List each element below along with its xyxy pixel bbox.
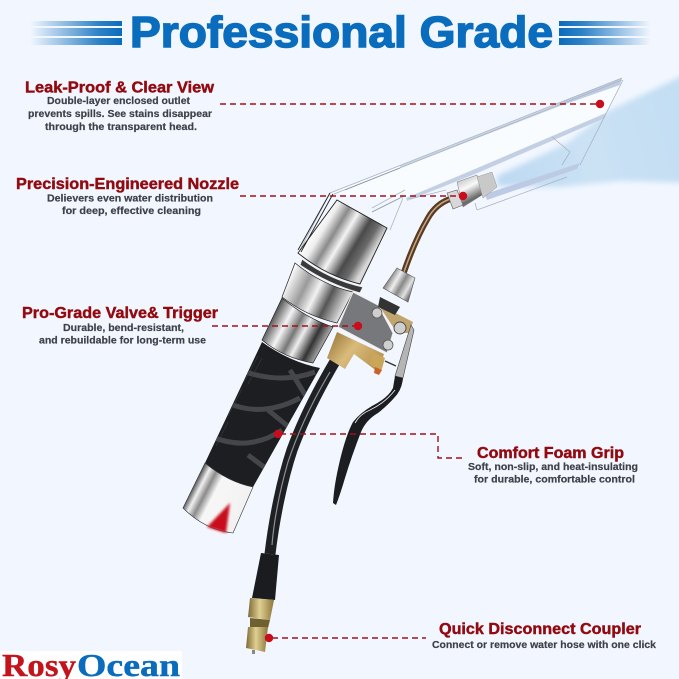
chrome lower section <box>262 298 333 363</box>
transparent head <box>300 78 623 250</box>
quick coupler <box>246 598 274 654</box>
description: nozzle: for deep, effective cleaning <box>62 206 201 217</box>
compression nut <box>378 268 415 315</box>
description: leak-proof <box>28 96 212 133</box>
callout: leak-proof <box>25 80 604 133</box>
brass nozzle <box>447 172 497 209</box>
valve plate <box>338 292 413 353</box>
extractor wand illustration <box>183 78 623 654</box>
leader: valve <box>212 322 362 330</box>
description: coupler: Connect or remove water hose with one click <box>432 640 656 651</box>
hose ferrule <box>252 553 279 600</box>
flexible hose <box>270 358 337 554</box>
heading: coupler: Quick Disconnect Coupler <box>439 621 641 638</box>
foam grip <box>205 342 320 487</box>
description: leak-proof: Double-layer enclosed outlet <box>47 96 191 107</box>
description: nozzle <box>47 194 213 217</box>
description: valve: and rebuildable for long-term use <box>39 336 206 346</box>
leader: leak-proof <box>220 100 604 108</box>
leader: coupler <box>265 634 426 642</box>
title banner <box>30 8 651 57</box>
description: grip: Soft, non-slip, and heat-insulating <box>468 462 638 473</box>
collar ring <box>300 259 363 293</box>
callout: coupler <box>265 621 656 651</box>
heading: valve: Pro-Grade Valve& Trigger <box>22 305 218 322</box>
description: leak-proof: through the transparent head. <box>45 122 197 133</box>
description: grip: for durable, comfortable control <box>474 474 635 486</box>
callout: valve <box>22 305 362 346</box>
title: Professional Grade <box>130 8 553 57</box>
chrome head cylinder <box>298 200 387 284</box>
description: valve <box>39 323 206 346</box>
left title stripes <box>30 21 122 45</box>
chrome middle section <box>282 263 353 323</box>
callout: nozzle <box>16 176 467 217</box>
trigger lever <box>333 325 414 505</box>
heading: nozzle: Precision-Engineered Nozzle <box>16 176 239 193</box>
left outline of head <box>298 193 333 252</box>
leader: grip <box>274 430 466 458</box>
brass elbow <box>327 332 396 375</box>
description: leak-proof: prevents spills. See stains disappear <box>28 109 212 120</box>
leader: nozzle <box>240 192 467 200</box>
chrome end cap <box>183 463 253 533</box>
heading: grip: Comfort Foam Grip <box>477 445 624 462</box>
description: nozzle: Delievers even water distribution <box>47 194 213 204</box>
brand logo <box>0 647 182 679</box>
callout: grip <box>274 430 638 486</box>
water spray <box>497 58 679 187</box>
description: valve: Durable, bend-resistant, <box>63 323 184 334</box>
right title stripes <box>559 21 651 45</box>
copper tube <box>404 199 450 272</box>
heading: leak-proof: Leak-Proof & Clear View <box>25 80 215 96</box>
description: grip <box>468 462 638 486</box>
